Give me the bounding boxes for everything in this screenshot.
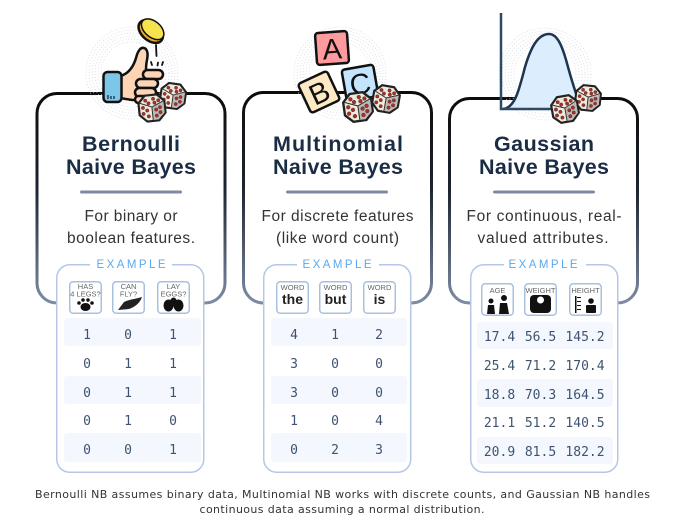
example box: EXAMPLE	[302, 259, 372, 271]
illustration: thumb flipping a coin with dice	[86, 14, 187, 122]
feature icons: but	[325, 291, 347, 307]
title: Multinomial	[273, 132, 403, 156]
title: Naive Bayes	[273, 155, 403, 179]
data table: 2	[331, 443, 339, 458]
data table: 21.1	[484, 416, 515, 431]
data table: 0	[124, 328, 132, 343]
data table: 3	[290, 357, 298, 372]
description: boolean features.	[67, 230, 195, 247]
title: Gaussian	[494, 132, 594, 156]
data table	[477, 322, 613, 464]
panel: Gaussian Naive Bayes	[450, 13, 638, 472]
data table: 17.4	[484, 330, 515, 345]
feature icons: WEIGHT	[526, 286, 556, 295]
description	[262, 208, 414, 247]
example box	[57, 258, 204, 472]
feature icons: HAS	[78, 282, 93, 291]
feature icons: WORD	[281, 283, 305, 292]
data table: 1	[169, 357, 177, 372]
caption: Bernoulli NB assumes binary data, Multinomial NB works with discrete counts, and Gaussian NB handles	[35, 488, 650, 501]
card outline	[244, 92, 432, 303]
description	[466, 208, 622, 247]
description: For binary or	[84, 208, 178, 225]
divider	[493, 190, 595, 194]
icon: block A: A	[321, 33, 344, 67]
data table: 81.5	[525, 445, 556, 460]
data table: 0	[83, 357, 91, 372]
feature icons	[277, 282, 395, 313]
icon: block C: C	[347, 67, 373, 103]
icon: dice	[550, 84, 602, 124]
caption	[35, 488, 650, 516]
data table: 51.2	[525, 416, 556, 431]
data table: 0	[83, 443, 91, 458]
data table: 1	[124, 357, 132, 372]
feature icons: HEIGHT	[571, 286, 600, 295]
title: Naive Bayes	[479, 155, 609, 179]
icon: thumbs up hand	[104, 48, 163, 103]
data table: 1	[124, 386, 132, 401]
description: For continuous, real-	[466, 208, 622, 225]
data table: 70.3	[525, 388, 556, 403]
feature icons: FLY?	[120, 290, 137, 298]
data table: 164.5	[565, 388, 605, 403]
caption: continuous data assuming a normal distribution.	[200, 503, 484, 516]
example box	[264, 258, 411, 472]
data table: 1	[169, 386, 177, 401]
data table: 1	[124, 414, 132, 429]
data table: 182.2	[565, 445, 605, 460]
panel: Bernoulli Naive Bayes	[37, 14, 225, 472]
chart: normal distribution curve	[501, 13, 582, 109]
data table: 0	[331, 386, 339, 401]
data table: 25.4	[484, 359, 515, 374]
panel: Multinomial Naive Bayes	[244, 27, 432, 472]
title	[273, 132, 403, 179]
feature icons: CAN	[121, 282, 136, 291]
data table: 3	[375, 443, 383, 458]
icon: coin	[134, 14, 169, 47]
feature icons	[70, 282, 189, 313]
data table: 1	[290, 414, 298, 429]
divider	[286, 190, 388, 194]
icon: dice	[342, 84, 401, 123]
icon: block B: B	[304, 75, 335, 112]
icon: dice	[138, 82, 187, 122]
data table: 145.2	[565, 330, 605, 345]
feature icons: 4 LEGS?	[70, 290, 101, 298]
illustration: bell curve with dice	[499, 13, 602, 124]
description: For discrete features	[262, 208, 414, 225]
data table: 1	[83, 328, 91, 343]
feature icons: AGE	[490, 286, 505, 295]
data table: 170.4	[565, 359, 605, 374]
illustration: letter blocks with dice	[294, 27, 401, 123]
data table	[64, 318, 201, 462]
data table: 0	[331, 357, 339, 372]
feature icons: WORD	[324, 283, 348, 292]
feature icons: EGGS?	[161, 290, 186, 298]
data table: 4	[375, 414, 383, 429]
title	[66, 132, 196, 179]
card outline	[37, 94, 225, 303]
data table: 4	[290, 328, 298, 343]
feature icons	[482, 284, 601, 315]
data table: 1	[331, 328, 339, 343]
description: valued attributes.	[478, 230, 608, 247]
data table: 71.2	[525, 359, 556, 374]
data table: 3	[290, 386, 298, 401]
feature icons: WORD	[368, 283, 392, 292]
data table: 0	[83, 386, 91, 401]
feature icons: the	[282, 291, 303, 307]
data table: 1	[169, 328, 177, 343]
data table: 18.8	[484, 388, 515, 403]
data table: 2	[375, 328, 383, 343]
divider	[80, 190, 182, 194]
feature icons: LAY	[167, 282, 180, 291]
data table: 1	[169, 443, 177, 458]
data table: 56.5	[525, 330, 556, 345]
data table	[271, 318, 407, 462]
data table: 0	[375, 357, 383, 372]
data table: 0	[124, 443, 132, 458]
data table: 0	[331, 414, 339, 429]
description: (like word count)	[276, 230, 399, 247]
data table: 0	[169, 414, 177, 429]
title	[479, 132, 609, 179]
feature icons: is	[374, 291, 386, 307]
example box	[471, 258, 618, 472]
example box: EXAMPLE	[96, 259, 166, 271]
description	[67, 208, 195, 247]
example box: EXAMPLE	[508, 259, 578, 271]
title: Naive Bayes	[66, 155, 196, 179]
data table: 0	[290, 443, 298, 458]
data table: 0	[83, 414, 91, 429]
data table: 0	[375, 386, 383, 401]
card outline	[450, 98, 638, 303]
data table: 140.5	[565, 416, 605, 431]
data table: 20.9	[484, 445, 515, 460]
title: Bernoulli	[82, 132, 180, 156]
